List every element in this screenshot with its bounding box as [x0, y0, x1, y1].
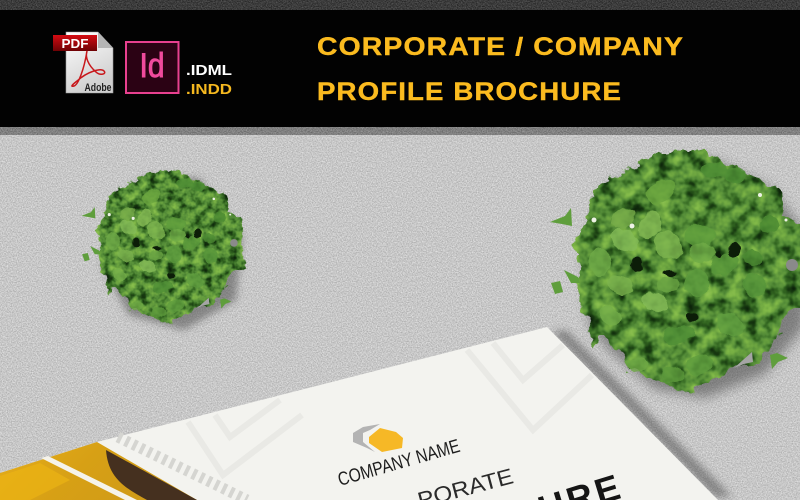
dashed border stripe [118, 437, 247, 500]
brown building panel [106, 450, 197, 500]
header band [0, 10, 800, 127]
top dark strip [0, 0, 800, 10]
title: line two: PROFILE BROCHURE [317, 78, 622, 106]
icon: InDesign [126, 42, 178, 93]
icon: PDF document [53, 32, 113, 94]
header band shadow strip [0, 127, 800, 135]
plant: large [550, 153, 800, 397]
icon: InDesign: Id [140, 47, 164, 85]
company name: COMPANY NAME [336, 436, 462, 491]
white diagonal stripe [41, 456, 137, 500]
plant shadow: large [585, 159, 800, 398]
format label: .IDML: .IDML [186, 63, 232, 79]
cover yellow panel [0, 442, 197, 500]
plant shadow: small [102, 178, 242, 330]
format label: .INDD: .INDD [186, 82, 232, 98]
title: line one: CORPORATE / COMPANY [317, 33, 684, 61]
brochure [0, 327, 718, 500]
brochure page [0, 327, 718, 500]
icon: PDF document: PDF [62, 36, 89, 51]
icon: PDF document: Adobe [84, 82, 112, 94]
plant: small [82, 172, 245, 326]
cover highlight [0, 463, 70, 500]
company logo [353, 424, 403, 452]
chevron watermark [188, 343, 592, 475]
brochure shadow [552, 330, 732, 497]
